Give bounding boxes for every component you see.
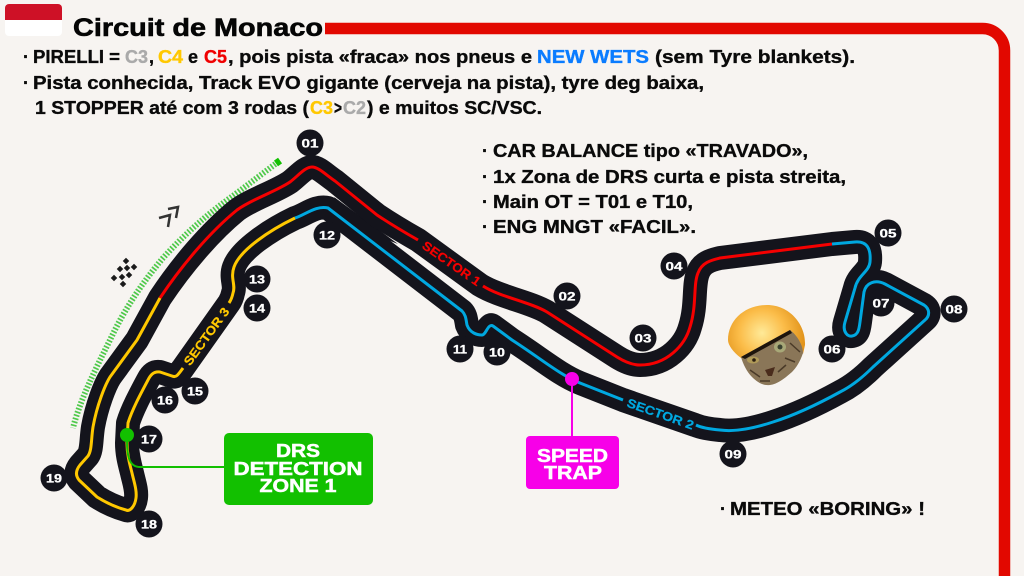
turn 05 xyxy=(874,220,902,246)
text block: tyres and race notes: ) e muitos SC/VSC. xyxy=(367,98,542,118)
text block: weather note: METEO «BORING» ! xyxy=(730,499,925,519)
turn 17: 17 xyxy=(141,432,157,446)
text block: tyres and race notes: PIRELLI = xyxy=(33,47,120,67)
track surface xyxy=(76,167,929,510)
sector 1 line xyxy=(160,167,832,365)
text block: tyres and race notes: > xyxy=(334,98,342,118)
track merge between turns 01 and 12 xyxy=(334,197,398,244)
red header frame line xyxy=(325,28,1004,576)
icon: Monaco flag xyxy=(5,4,62,36)
turn 19 xyxy=(40,464,68,492)
turn 01 xyxy=(296,130,324,156)
turn 11 xyxy=(446,336,474,362)
turn 03: 03 xyxy=(634,332,652,346)
turn 06 xyxy=(818,336,846,362)
callout: speed trap: TRAP xyxy=(544,462,602,483)
text block: tyres and race notes: , xyxy=(149,47,154,67)
text block: tyres and race notes: e xyxy=(188,47,198,67)
text block: weather note: · xyxy=(720,499,726,519)
track map xyxy=(76,167,929,510)
text block: tyres and race notes: C4 xyxy=(158,47,183,67)
text block: car balance notes: ENG MNGT «FACIL». xyxy=(493,217,696,237)
turn 04: 04 xyxy=(666,260,683,274)
turn 05: 05 xyxy=(880,226,897,240)
icon: chequered flag xyxy=(111,258,137,287)
text block: tyres and race notes: C2 xyxy=(343,98,366,118)
text block: tyres and race notes: C3 xyxy=(125,47,148,67)
turn 12 xyxy=(314,222,340,248)
label: sector 1: SECTOR 1 xyxy=(419,238,483,289)
text block: car balance notes: · xyxy=(482,141,488,161)
callout: DRS detection zone 1 xyxy=(120,428,373,505)
turn 01: 01 xyxy=(302,136,319,150)
turn 13 xyxy=(244,266,270,292)
turn 10: 10 xyxy=(489,346,505,360)
turn 02 xyxy=(554,282,580,310)
turn 10 xyxy=(484,338,510,366)
callout: DRS detection zone 1: ZONE 1 xyxy=(260,475,336,496)
text block: tyres and race notes: NEW WETS xyxy=(537,47,649,67)
text block: tyres and race notes: (sem Tyre blankets). xyxy=(655,47,855,67)
turn number badges xyxy=(40,130,968,538)
turn 14: 14 xyxy=(249,302,265,316)
turn 11: 11 xyxy=(453,342,467,356)
icon: direction chevrons xyxy=(159,207,178,227)
text block: car balance notes: · xyxy=(482,192,488,212)
sector 2 line xyxy=(295,207,929,431)
turn 18 xyxy=(136,510,162,538)
text block: car balance notes: CAR BALANCE tipo «TRAVADO», xyxy=(493,141,808,161)
turn 08: 08 xyxy=(946,302,963,316)
text block: car balance notes: 1x Zona de DRS curta e pista streita, xyxy=(493,167,846,187)
title: Circuit de Monaco xyxy=(73,14,323,42)
turn 12: 12 xyxy=(319,228,335,242)
text block: tyres and race notes: C5 xyxy=(204,47,227,67)
text block: car balance notes: Main OT = T01 e T10, xyxy=(493,192,693,212)
label: sector 2: SECTOR 2 xyxy=(625,396,696,433)
turn 17 xyxy=(136,426,162,452)
text block: tyres and race notes: · xyxy=(23,47,29,67)
turn 15 xyxy=(182,378,208,404)
callout: DRS detection zone 1: DETECTION xyxy=(234,458,362,479)
text block: car balance notes xyxy=(482,141,846,237)
turn 13: 13 xyxy=(249,272,265,286)
text block: car balance notes: · xyxy=(482,217,488,237)
text block: car balance notes: · xyxy=(482,167,488,187)
turn 18: 18 xyxy=(141,518,157,532)
turn 19: 19 xyxy=(46,472,62,486)
turn 16: 16 xyxy=(157,394,173,408)
text block: tyres and race notes: 1 STOPPER até com 3 rodas ( xyxy=(35,98,309,118)
turn 08 xyxy=(940,296,968,322)
turn 02: 02 xyxy=(558,290,576,304)
turn 15: 15 xyxy=(187,384,203,398)
turn 07 xyxy=(868,290,894,316)
icon: cat wearing a yellow helmet xyxy=(728,305,805,385)
text block: tyres and race notes: C3 xyxy=(310,98,333,118)
text block: tyres and race notes: Pista conhecida, Track EVO gigante (cerveja na pista), tyre deg baixa, xyxy=(33,73,704,93)
callout: DRS detection zone 1: DRS xyxy=(276,440,320,461)
icon: DRS zone end marker xyxy=(274,158,282,166)
icon: green DRS dotted zone xyxy=(73,162,278,428)
turn 07: 07 xyxy=(872,296,890,310)
turn 16 xyxy=(152,386,178,414)
callout: speed trap: SPEED xyxy=(537,445,608,466)
turn 06: 06 xyxy=(824,342,841,356)
sector 3 line xyxy=(76,218,295,510)
turn 14 xyxy=(244,294,270,322)
turn 04 xyxy=(660,252,688,280)
callout: speed trap xyxy=(526,372,619,489)
turn 09 xyxy=(720,440,746,468)
turn 03 xyxy=(630,324,656,352)
text block: tyres and race notes: , pois pista «fraca» nos pneus e xyxy=(228,47,532,67)
text block: tyres and race notes: · xyxy=(23,73,29,93)
label: sector 3: SECTOR 3 xyxy=(181,305,232,368)
turn 09: 09 xyxy=(724,448,742,462)
text block: tyres and race notes xyxy=(23,47,855,118)
